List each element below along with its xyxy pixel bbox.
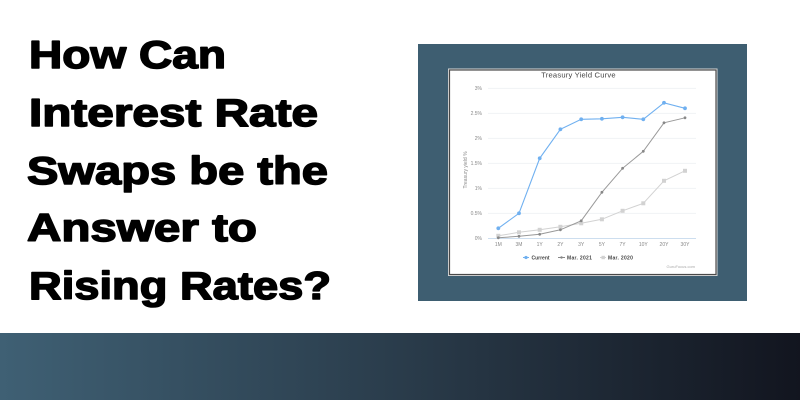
y axis: [463, 86, 483, 242]
series: Current: [496, 101, 687, 230]
y axis: 1.5%: [471, 161, 483, 167]
chart: 5Y: [599, 242, 606, 248]
chart: 10Y: [639, 242, 648, 248]
y axis: 2.5%: [471, 111, 483, 117]
teal panel: [418, 44, 747, 301]
y axis: Treasury yield %: [463, 151, 469, 189]
title: Swaps be the: [27, 150, 328, 193]
chart: [448, 68, 718, 276]
title: Rising Rates?: [29, 265, 331, 308]
gradient footer bar: [0, 333, 800, 400]
credit: GuruFocus.com: [667, 264, 696, 269]
title: [27, 34, 331, 308]
chart: 3Y: [578, 242, 585, 248]
legend: Mar. 2021: [567, 256, 592, 262]
title: How Can: [29, 34, 226, 77]
chart: 3M: [516, 242, 522, 248]
title: Interest Rate: [29, 92, 318, 135]
y axis: 0%: [475, 236, 483, 242]
chart frame: [448, 68, 718, 276]
chart: 1Y: [537, 242, 543, 248]
legend: Current: [532, 256, 550, 262]
x axis: [488, 238, 696, 240]
chart: 2Y: [557, 242, 564, 248]
chart: 30Y: [681, 242, 690, 248]
y axis: 3%: [475, 86, 483, 92]
legend: [523, 256, 633, 262]
grid lines: [488, 88, 696, 213]
y axis: 0.5%: [471, 211, 483, 217]
series: Mar. 2021: [497, 116, 686, 239]
y axis: 1%: [475, 186, 483, 192]
y axis: 2%: [475, 136, 483, 142]
title: Answer to: [27, 207, 257, 250]
chart: 1M: [495, 242, 502, 248]
legend: Mar. 2020: [608, 256, 633, 262]
chart: 20Y: [660, 242, 669, 248]
chart title: Treasury Yield Curve: [541, 70, 616, 80]
chart: 7Y: [620, 242, 626, 248]
series: Mar. 2020: [496, 169, 687, 238]
